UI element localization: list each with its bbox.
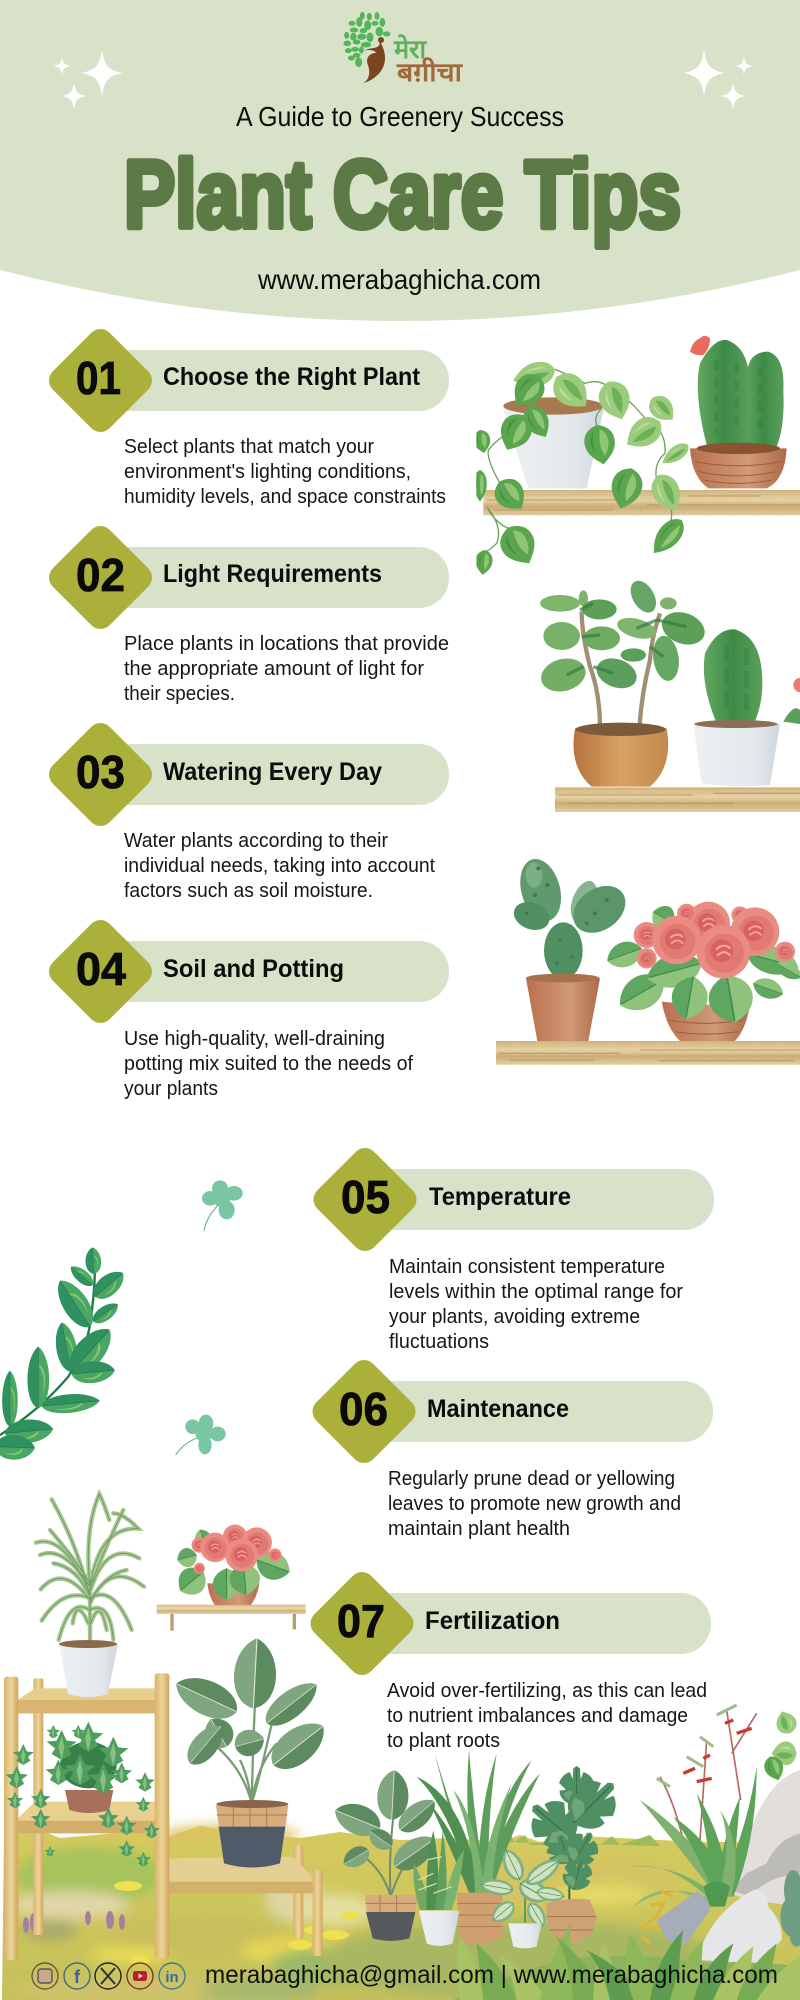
- description: your plants, avoiding extreme: [389, 1306, 640, 1328]
- leafy sprig: [761, 1708, 800, 1783]
- icon: linkedin: in: [165, 1969, 179, 1986]
- description: factors such as soil moisture.: [124, 880, 373, 902]
- icon: instagram: [32, 1963, 58, 1989]
- description: [124, 1028, 413, 1100]
- description: [388, 1468, 681, 1540]
- description: Regularly prune dead or yellowing: [388, 1468, 675, 1490]
- panel: step 06: [307, 1355, 713, 1540]
- heading: Watering Every Day: [163, 758, 382, 786]
- back post and low bench rear post: [33, 1678, 303, 1938]
- illustration: wooden plant stand: [4, 1673, 323, 1960]
- description: humidity levels, and space constraints: [124, 486, 446, 508]
- description: Place plants in locations that provide: [124, 633, 449, 655]
- panel: step 02: [44, 521, 449, 705]
- white pot: [693, 720, 780, 786]
- succulent: [780, 1870, 800, 1947]
- description: their species.: [124, 683, 235, 705]
- icon: linkedin: [159, 1963, 185, 1989]
- icon: facebook: [64, 1963, 90, 1989]
- brown pot: [574, 723, 668, 787]
- illustration: shelf with pothos and cactus: [472, 336, 800, 576]
- heading bar: [100, 350, 449, 411]
- heading bar: [364, 1381, 713, 1442]
- pot: [207, 1583, 259, 1605]
- footer contact line: merabaghicha@gmail.com | www.merabaghicha.com: [205, 1961, 778, 1989]
- illustration: shelf with cactus and roses: [496, 854, 800, 1065]
- icon: clover 1: [202, 1180, 243, 1231]
- icon: sparkles left: [53, 50, 123, 109]
- blue rock: [657, 1892, 710, 1943]
- small shelf: [157, 1605, 306, 1631]
- white pot: [503, 397, 604, 488]
- stems: [217, 1703, 277, 1803]
- palm basket: [457, 1893, 503, 1944]
- white rock: [697, 1890, 782, 1963]
- tall palm blades: [417, 1750, 540, 1897]
- panel: step 05: [308, 1143, 714, 1353]
- leaves: [36, 1494, 144, 1643]
- description: potting mix suited to the needs of: [124, 1053, 413, 1075]
- low bench: [168, 1857, 315, 1893]
- number badge: [307, 1355, 421, 1468]
- description: Avoid over-fertilizing, as this can lead: [387, 1680, 707, 1702]
- description: [387, 1680, 707, 1752]
- round cactus: [704, 629, 762, 725]
- logo wordmark: बग़ीचा: [396, 57, 463, 87]
- rock shading: [732, 1833, 800, 1897]
- description: [124, 830, 435, 902]
- number: 01: [76, 352, 121, 404]
- number: 07: [337, 1595, 385, 1647]
- logo tree: [344, 12, 390, 83]
- number badge: [308, 1143, 422, 1256]
- website url: www.merabaghicha.com: [257, 264, 541, 295]
- number: 06: [339, 1383, 388, 1435]
- heading: Soil and Potting: [163, 955, 344, 983]
- heading: Fertilization: [425, 1607, 560, 1635]
- description: Select plants that match your: [124, 436, 374, 458]
- description: levels within the optimal range for: [389, 1281, 683, 1303]
- flower: [690, 336, 710, 355]
- number: 05: [341, 1171, 390, 1223]
- pothos vine: [472, 358, 692, 576]
- front posts: [4, 1673, 323, 1960]
- number: 04: [76, 943, 126, 995]
- snake plant: [413, 1830, 464, 1910]
- meadow flowers: [23, 1881, 359, 1964]
- description: your plants: [124, 1078, 218, 1100]
- panel: step 04: [44, 915, 449, 1100]
- plant A basket: [365, 1895, 417, 1941]
- panel: step 07: [305, 1567, 711, 1752]
- leaves: [169, 1637, 334, 1778]
- plant A leaves: [330, 1769, 442, 1897]
- number: 02: [76, 549, 125, 601]
- yellow branch: [640, 1890, 673, 1943]
- big rock: [730, 1770, 800, 1907]
- number badge: [305, 1567, 419, 1680]
- logo wordmark: [393, 34, 463, 87]
- illustration: ivy pot on stand: [5, 1722, 160, 1867]
- heading bar: [365, 1169, 714, 1230]
- subtitle: A Guide to Greenery Success: [236, 101, 564, 132]
- middle shelf: [16, 1802, 158, 1833]
- description: Water plants according to their: [124, 830, 388, 852]
- header banner: [0, 0, 800, 321]
- roses: [634, 902, 795, 979]
- heading: Light Requirements: [163, 560, 382, 588]
- description: [124, 436, 446, 508]
- red flower stems: [657, 1705, 757, 1840]
- description: Maintain consistent temperature: [389, 1256, 665, 1278]
- icons: social media row: [32, 1963, 185, 1989]
- cactus: [697, 340, 784, 454]
- description: Use high-quality, well-draining: [124, 1028, 385, 1050]
- top shelf: [15, 1688, 155, 1713]
- illustration: big leaf plant in basket: [169, 1637, 334, 1867]
- logo wordmark: मेरा: [393, 34, 427, 64]
- number badge: [44, 324, 157, 437]
- description: to plant roots: [387, 1730, 500, 1752]
- ivy foliage: [5, 1722, 160, 1867]
- heading bar: [100, 547, 449, 608]
- pot: [65, 1790, 113, 1813]
- monstera: [518, 1766, 629, 1900]
- rose leaves: [603, 901, 800, 1026]
- icon: sparkles right: [683, 50, 753, 109]
- foreground blades: [457, 1923, 800, 2000]
- shelf: [483, 490, 800, 515]
- icon: x: [95, 1963, 121, 1989]
- panel: step 01: [44, 324, 449, 508]
- description: to nutrient imbalances and damage: [387, 1705, 688, 1727]
- illustration: green branch: [0, 1247, 130, 1460]
- jade leaves: [537, 576, 709, 696]
- clipped flower and leaf: [783, 678, 800, 724]
- description: leaves to promote new growth and: [388, 1493, 681, 1515]
- heading: Temperature: [429, 1183, 571, 1211]
- rose pot: [662, 1002, 750, 1041]
- logo: [344, 12, 463, 87]
- illustration: rocks and wild plants: [453, 1705, 800, 2000]
- number badge: [44, 718, 157, 831]
- heading: Choose the Right Plant: [163, 363, 421, 391]
- snake plant pot: [419, 1911, 459, 1946]
- description: environment's lighting conditions,: [124, 461, 411, 483]
- panel: step 03: [44, 718, 449, 902]
- description: individual needs, taking into account: [124, 855, 435, 877]
- illustration: garden ground: [2, 1825, 800, 2000]
- prickly pear pads: [510, 854, 634, 979]
- pot: [59, 1640, 118, 1697]
- description: maintain plant health: [388, 1518, 570, 1540]
- heading: Maintenance: [427, 1395, 569, 1423]
- illustration: rose on small shelf: [157, 1525, 306, 1631]
- monstera basket: [547, 1899, 597, 1943]
- illustration: potted plants group: [330, 1750, 629, 1948]
- description: [389, 1256, 683, 1353]
- description: fluctuations: [389, 1331, 489, 1353]
- shelf: [555, 787, 800, 812]
- terracotta pot: [526, 974, 600, 1041]
- foreground foliage base: [453, 1956, 800, 2000]
- dieffenbachia pot: [508, 1923, 542, 1948]
- description: [124, 633, 449, 705]
- dieffenbachia: [479, 1846, 566, 1930]
- icon: facebook: f: [74, 1967, 81, 1987]
- number badge: [44, 915, 157, 1028]
- heading bar: [362, 1593, 711, 1654]
- illustration: dracaena in white pot: [36, 1494, 144, 1697]
- number: 03: [76, 746, 125, 798]
- stems: [582, 612, 660, 728]
- heading bar: [100, 744, 449, 805]
- number badge: [44, 521, 157, 634]
- icon: clover 2: [176, 1415, 226, 1455]
- terracotta bowl: [690, 448, 787, 488]
- illustration: shelf with jade plant and cactus: [537, 576, 800, 812]
- heading bar: [100, 941, 449, 1002]
- icon: youtube: [127, 1963, 153, 1989]
- basket: [216, 1800, 288, 1867]
- shelf: [496, 1041, 800, 1065]
- description: the appropriate amount of light for: [124, 658, 424, 680]
- leaves and flowers: [172, 1525, 294, 1601]
- grass cluster: [630, 1767, 757, 1907]
